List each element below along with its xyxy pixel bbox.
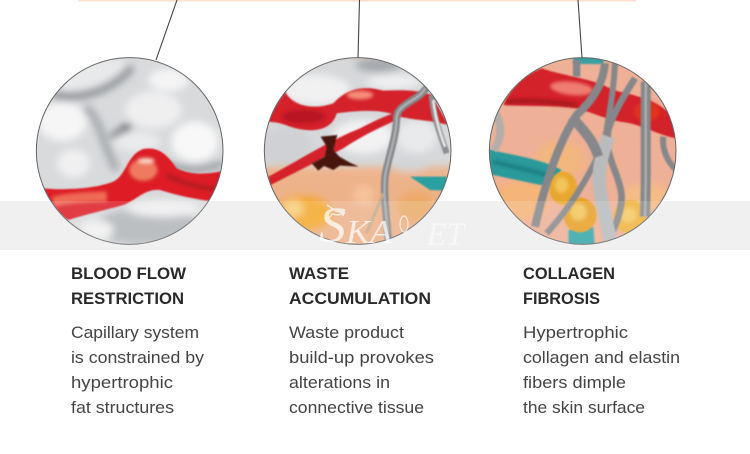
icon: collagen fibers <box>493 60 677 240</box>
text block: collagen fibrosis: COLLAGEN <box>523 264 615 283</box>
icon: collagen fibers <box>367 87 447 240</box>
watermark: KA <box>345 214 392 251</box>
watermark: ET <box>426 217 467 253</box>
icon: red capillaries <box>265 88 448 185</box>
connector line: blood flow <box>156 0 177 60</box>
text block: blood flow restriction: is constrained by <box>71 348 205 367</box>
grey background band <box>0 201 750 250</box>
connector line: collagen <box>578 0 582 58</box>
panel: blood flow illustration <box>33 53 227 248</box>
text block: blood flow restriction: BLOOD FLOW <box>71 264 187 283</box>
text block: waste accumulation: ACCUMULATION <box>289 289 431 308</box>
text block: collagen fibrosis: collagen and elastin <box>523 348 680 367</box>
text block: collagen fibrosis: FIBROSIS <box>523 289 600 308</box>
panel: collagen illustration <box>487 55 680 250</box>
band lightening overlay <box>0 201 750 250</box>
text block: waste accumulation <box>289 264 434 417</box>
text block: collagen fibrosis: fibers dimple <box>523 373 626 392</box>
text block: blood flow restriction: hypertrophic <box>71 373 174 392</box>
text block: blood flow restriction: fat structures <box>71 398 174 417</box>
panel: waste illustration <box>260 55 457 250</box>
connector line: waste <box>358 0 360 58</box>
watermark <box>319 196 467 253</box>
text block: collagen fibrosis: the skin surface <box>523 398 645 417</box>
text block: waste accumulation: WASTE <box>289 264 349 283</box>
top orange rule <box>78 0 636 2</box>
icon: red vessel <box>503 68 680 138</box>
text block: waste accumulation: connective tissue <box>289 398 424 417</box>
text block: blood flow restriction: Capillary system <box>71 323 199 342</box>
icon: teal vessel <box>410 177 447 191</box>
icon: teal vessels <box>487 57 603 250</box>
icon: red capillary <box>43 148 224 220</box>
text block: waste accumulation: Waste product <box>289 323 404 342</box>
icon: fat globules <box>549 172 647 233</box>
text block: waste accumulation: alterations in <box>289 373 390 392</box>
text block: blood flow restriction: RESTRICTION <box>71 289 184 308</box>
text block: collagen fibrosis: Hypertrophic <box>523 323 629 342</box>
text block: blood flow restriction <box>71 264 205 417</box>
watermark: S <box>319 196 346 252</box>
icon: waste deposit <box>312 135 359 171</box>
text block: waste accumulation: build-up provokes <box>289 348 434 367</box>
text block: collagen fibrosis <box>523 264 680 417</box>
